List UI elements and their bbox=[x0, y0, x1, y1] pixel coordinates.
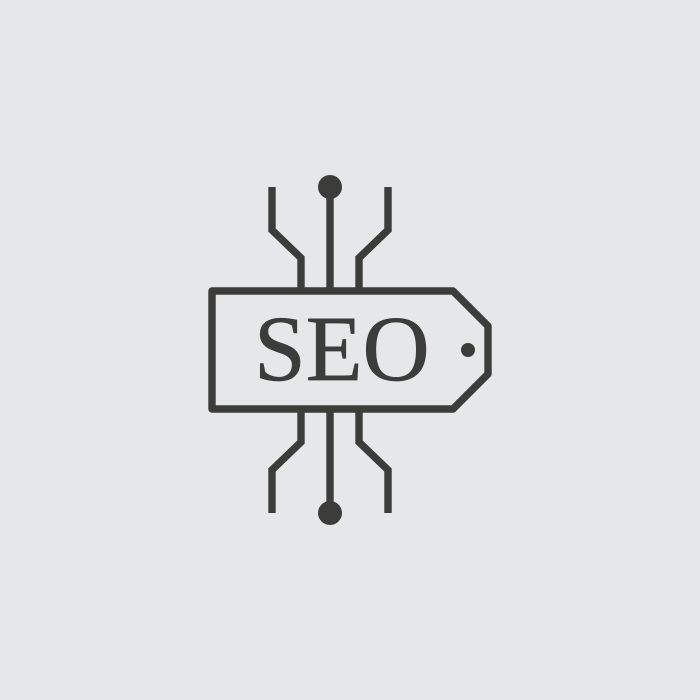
icon: top circuit node bbox=[318, 175, 342, 199]
icon: circuit lines below tag bbox=[272, 409, 388, 513]
icon: tag outline bbox=[212, 291, 488, 409]
icon: bottom circuit node bbox=[318, 501, 342, 525]
icon: tag hole bbox=[461, 343, 475, 357]
title: SEO: SEO bbox=[254, 298, 430, 401]
icon: circuit lines above tag bbox=[272, 187, 388, 291]
